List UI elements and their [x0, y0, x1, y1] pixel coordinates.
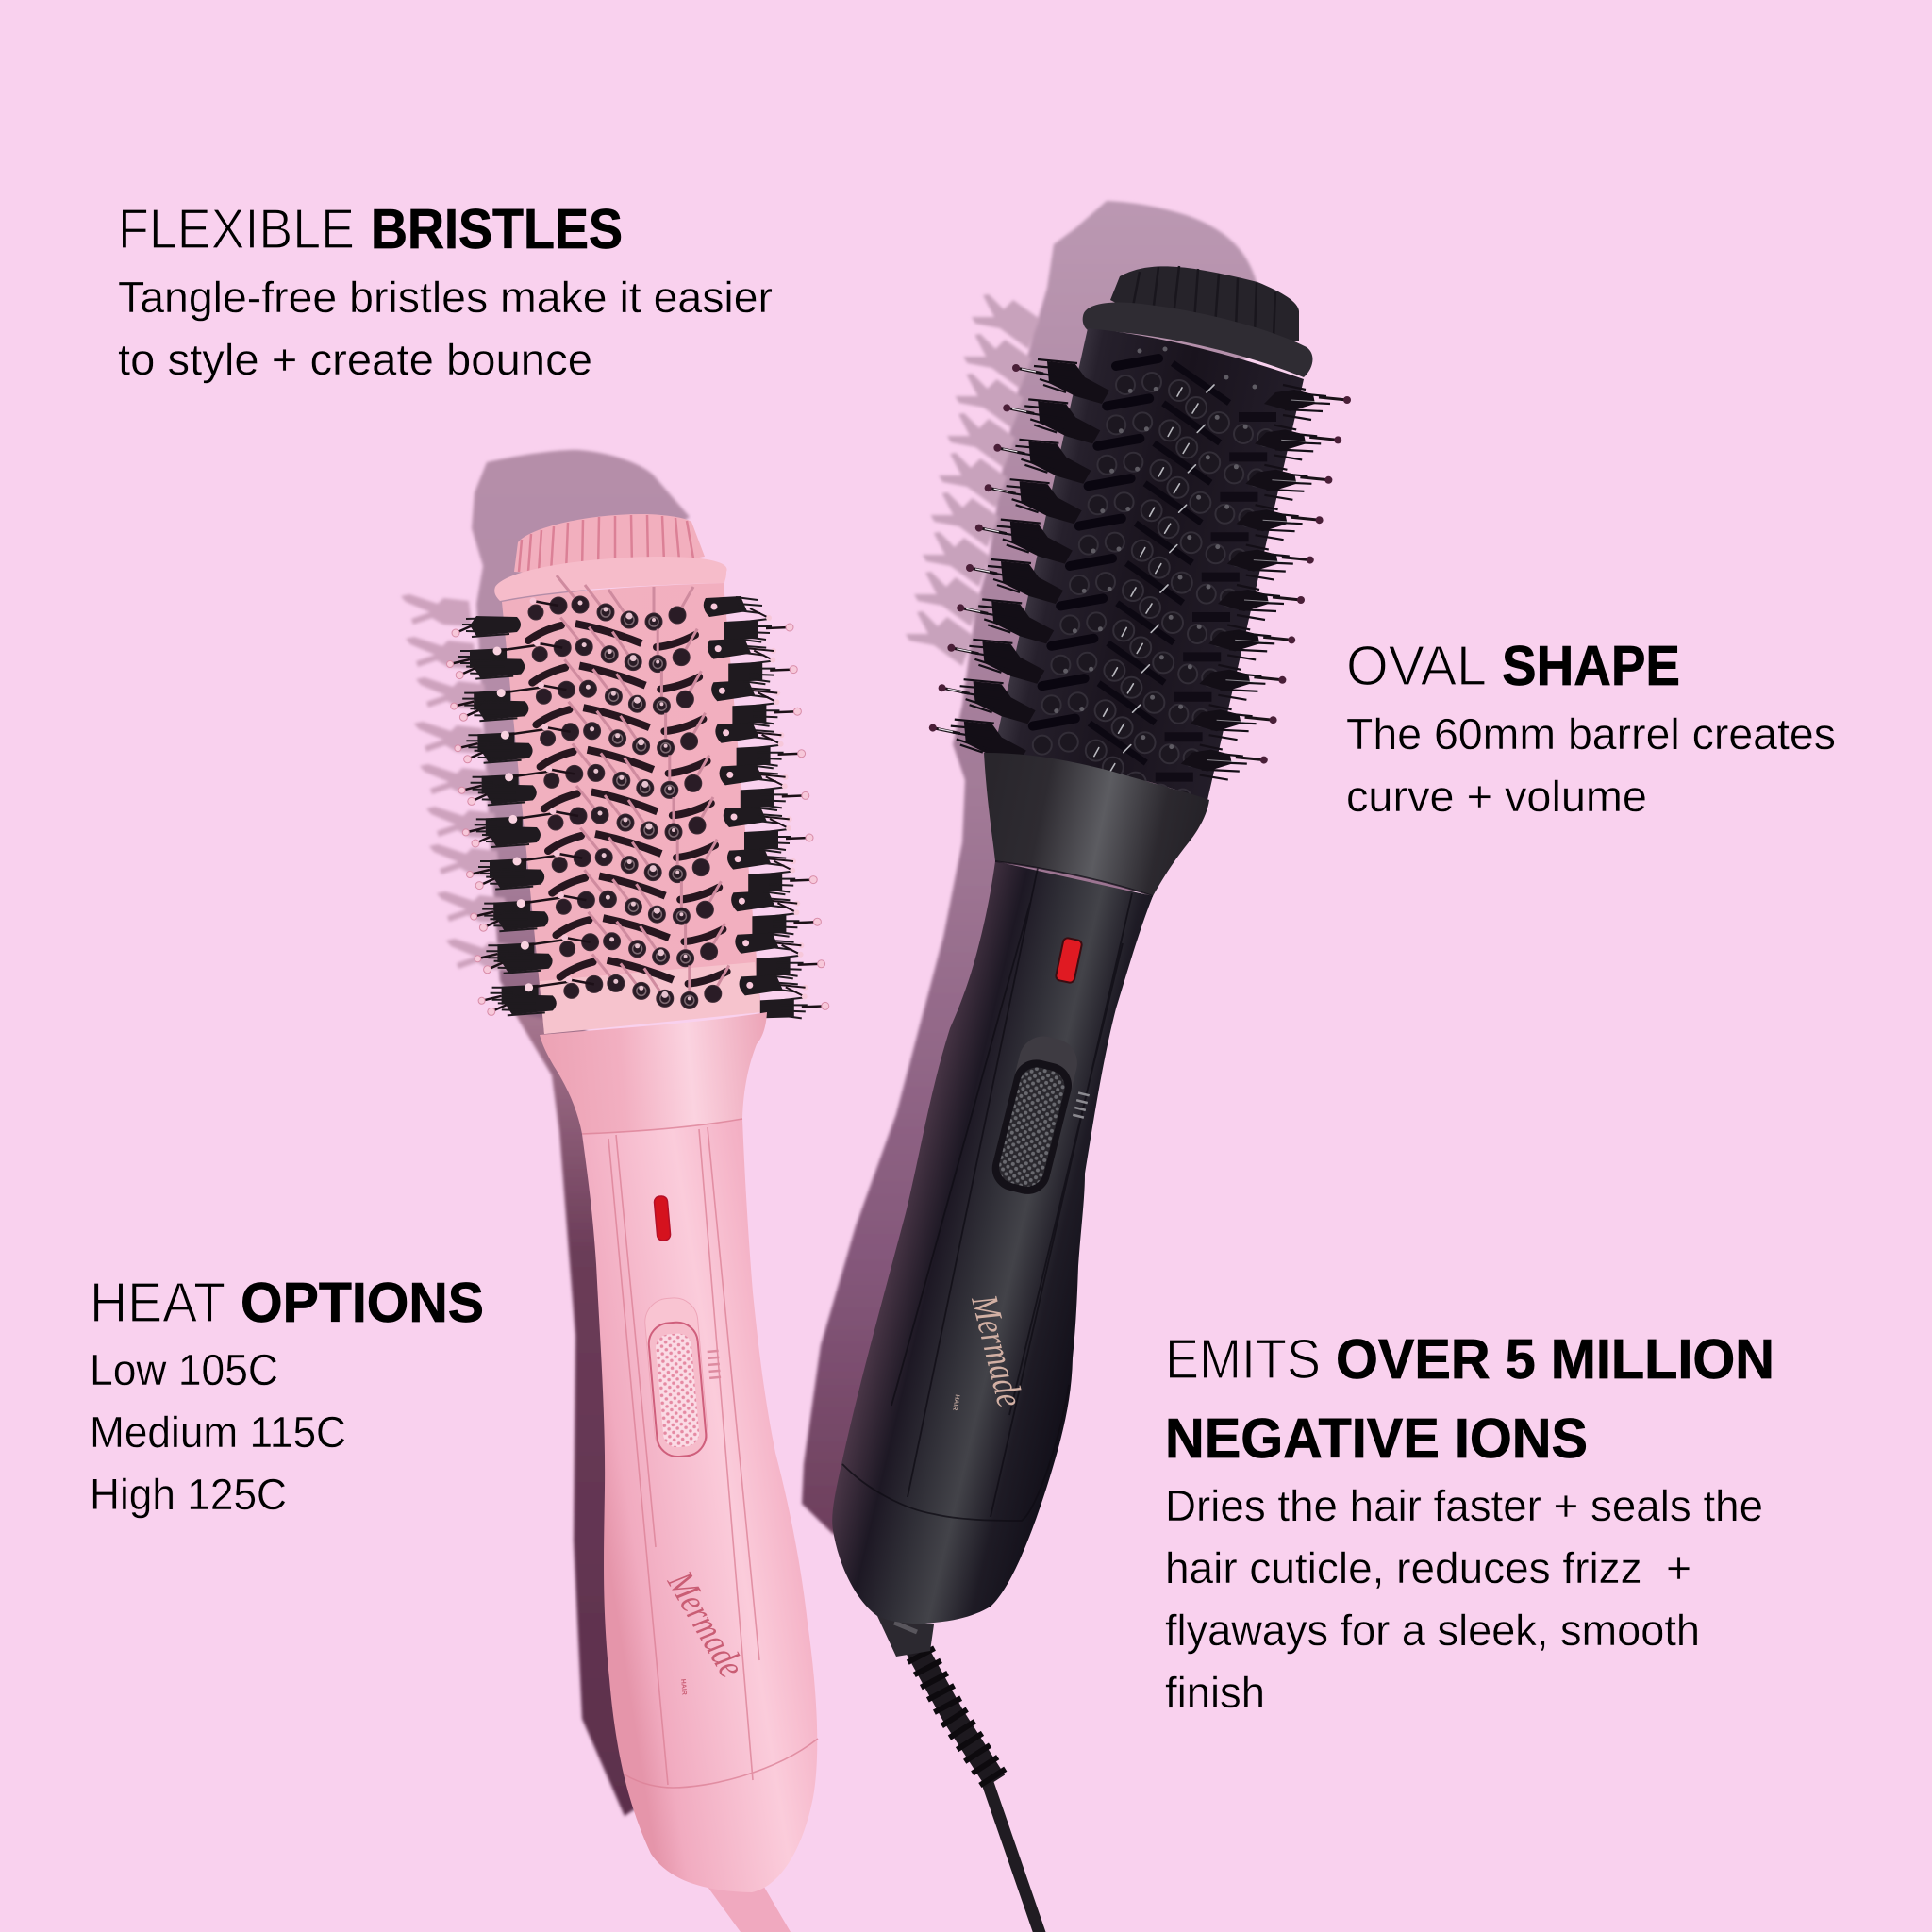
black heat switch — [988, 1031, 1101, 1204]
heading: heat options: HEAT — [90, 1272, 225, 1334]
pink panel lines — [582, 1119, 818, 1788]
heading: oval shape — [1346, 635, 1680, 697]
body: negative ions: finish — [1165, 1668, 1265, 1717]
black handle body — [832, 861, 1153, 1624]
black collar — [984, 753, 1209, 896]
body: flexible bristles — [118, 273, 773, 384]
product: pink brush — [447, 514, 829, 1932]
product: black brush — [832, 266, 1351, 1932]
callout: oval shape — [1346, 635, 1836, 821]
heading: negative ions: OVER 5 MILLION — [1336, 1328, 1774, 1391]
black brand logo: HAIR — [951, 1394, 960, 1411]
body: heat options — [90, 1345, 346, 1519]
pink LED — [654, 1195, 671, 1241]
body: oval shape: The 60mm barrel creates — [1346, 709, 1836, 758]
pink handle body — [582, 1119, 817, 1892]
black bristle rows — [929, 347, 1351, 807]
body: negative ions: Dries the hair faster + seals the — [1165, 1481, 1763, 1530]
body: negative ions: hair cuticle, reduces frizz + — [1165, 1543, 1691, 1592]
black panel lines — [842, 861, 1153, 1521]
pink bristle rows — [447, 575, 829, 1018]
body: heat options: Low 105C — [90, 1345, 278, 1394]
heading: oval shape: SHAPE — [1502, 635, 1680, 697]
body: oval shape — [1346, 709, 1836, 821]
black barrel — [993, 328, 1304, 800]
body: negative ions: flyaways for a sleek, smooth — [1165, 1606, 1700, 1655]
heading: heat options: OPTIONS — [241, 1272, 484, 1334]
pink brand logo: Mermade — [659, 1563, 754, 1684]
callout: heat options — [90, 1272, 484, 1519]
heading: flexible bristles: BRISTLES — [371, 198, 623, 260]
shadow: black brush — [802, 201, 1257, 1547]
heading: heat options — [90, 1272, 484, 1334]
pink barrel — [502, 583, 761, 1034]
pink heat switch — [643, 1294, 727, 1458]
callout: flexible bristles — [118, 198, 773, 384]
heading: negative ions: NEGATIVE IONS — [1165, 1407, 1588, 1470]
body: flexible bristles: Tangle-free bristles make it easier — [118, 273, 773, 322]
heading: negative ions — [1165, 1328, 1774, 1470]
pink brand logo: HAIR — [679, 1679, 687, 1695]
body: flexible bristles: to style + create bounce — [118, 335, 592, 384]
pink barrel base band — [540, 962, 761, 1034]
pink brush cap — [494, 514, 727, 601]
heading: flexible bristles: FLEXIBLE — [118, 198, 355, 260]
body: negative ions — [1165, 1481, 1763, 1717]
body: oval shape: curve + volume — [1346, 772, 1647, 821]
shadow: pink brush — [401, 450, 690, 1816]
black LED — [1055, 937, 1083, 984]
pink collar — [540, 1012, 767, 1134]
heading: flexible bristles — [118, 198, 623, 260]
callout: negative ions — [1165, 1328, 1774, 1717]
black brush cap — [1083, 266, 1312, 377]
heading: oval shape: OVAL — [1346, 635, 1487, 697]
black brand logo — [951, 1291, 1032, 1411]
black cord — [877, 1616, 1041, 1932]
pink cord — [708, 1882, 791, 1932]
black brand logo: Mermade — [963, 1291, 1032, 1411]
heading: negative ions: EMITS — [1165, 1328, 1321, 1391]
body: heat options: High 125C — [90, 1470, 287, 1519]
body: heat options: Medium 115C — [90, 1407, 346, 1457]
